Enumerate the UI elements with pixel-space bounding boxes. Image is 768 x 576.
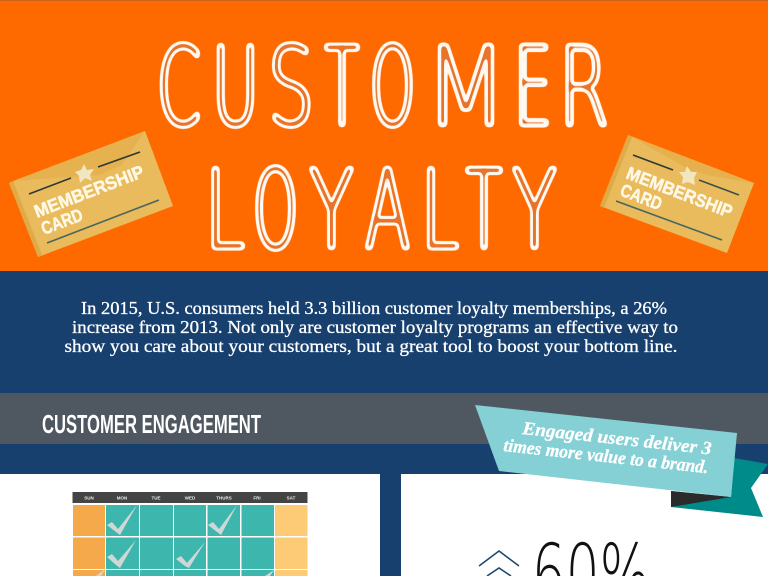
icon: right membership card xyxy=(600,135,754,253)
chart: engagement calendar: SUN xyxy=(84,496,94,500)
callout: engaged users ribbon xyxy=(475,405,768,517)
chart: engagement calendar: THURS xyxy=(216,496,232,500)
panel: navy introduction band xyxy=(0,271,768,393)
heading: customer engagement: CUSTOMER ENGAGEMENT xyxy=(42,409,261,439)
chart: engagement calendar: SAT xyxy=(287,496,296,500)
title: Customer Loyalty: L xyxy=(421,146,459,274)
panel: orange title header xyxy=(0,0,768,271)
title: Customer Loyalty: Y xyxy=(309,146,354,274)
chart: engagement calendar: TUE xyxy=(152,496,160,500)
text block: introduction: show you care about your customers, but a great tool to boost your bottom line. xyxy=(64,336,678,356)
icon: left membership card xyxy=(9,131,173,257)
text block: introduction xyxy=(64,298,678,356)
title: Customer Loyalty: R xyxy=(559,23,609,151)
chart: engagement calendar: WED xyxy=(185,496,196,500)
icon: double up chevrons xyxy=(479,551,519,576)
title: Customer Loyalty: O xyxy=(370,23,415,151)
title: Customer Loyalty: S xyxy=(268,23,314,151)
title: Customer Loyalty xyxy=(157,23,609,274)
callout: engaged users ribbon: Engaged users deliver 3 xyxy=(520,419,713,459)
icon: left membership card: MEMBERSHIP xyxy=(31,161,147,222)
callout: engaged users ribbon: times more value to a brand. xyxy=(502,436,709,478)
title: Customer Loyalty: T xyxy=(325,23,359,151)
title: Customer Loyalty: E xyxy=(514,23,552,151)
chart: engagement calendar: FRI xyxy=(253,496,261,500)
chart: engagement calendar: MON xyxy=(117,496,127,500)
title: Customer Loyalty: C xyxy=(157,23,201,151)
panel: calendar card xyxy=(0,474,380,576)
text block: introduction: increase from 2013. Not only are customer loyalty programs an effective way to xyxy=(72,317,678,337)
title: Customer Loyalty: O xyxy=(253,146,298,274)
text block: introduction: In 2015, U.S. consumers held 3.3 billion customer loyalty memberships, a 26% xyxy=(81,298,667,318)
icon: right membership card: CARD xyxy=(618,180,665,214)
title: Customer Loyalty: L xyxy=(205,146,245,274)
title: Customer Loyalty: U xyxy=(212,23,259,151)
title: Customer Loyalty: M xyxy=(425,23,507,151)
title: Customer Loyalty: T xyxy=(466,146,502,274)
title: Customer Loyalty: A xyxy=(365,146,410,274)
panel: customer engagement section bar xyxy=(0,393,768,444)
chart: engagement calendar xyxy=(72,492,308,576)
icon: right membership card: MEMBERSHIP xyxy=(624,163,735,222)
title: Customer Loyalty: Y xyxy=(512,146,557,274)
panel: statistic card xyxy=(401,474,768,576)
icon: left membership card: CARD xyxy=(38,205,86,239)
